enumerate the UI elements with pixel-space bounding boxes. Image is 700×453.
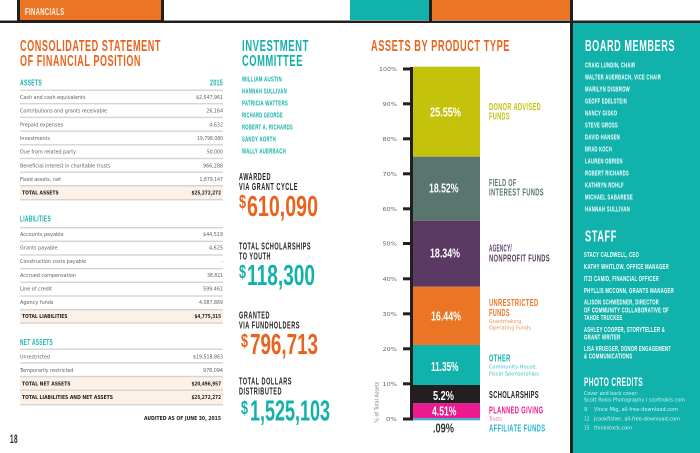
table: liabilities: - [222,259,223,265]
stat: awarded via grant cycle: VIA GRANT CYCLE [239,182,298,193]
bar segment: scholarships: 5.2% [433,388,454,403]
chart: y axis: 50% [382,242,397,248]
board member names: NANCY GISKO [585,111,617,118]
table: assets: $25,272,272 [192,191,221,197]
stat: granted via fundholders [239,311,318,361]
table: liabilities: Line of credit [20,286,52,292]
heading: investment committee: INVESTMENT [242,38,309,55]
table: liabilities: 4,087,889 [199,300,223,306]
stat: awarded via grant cycle: AWARDED [239,172,271,183]
table: net assets: TOTAL LIABILITIES AND NET ASSETS [22,395,113,401]
panel: assets by product type [371,38,550,436]
bar segment: agency nonprofit funds: NONPROFIT FUNDS [489,253,550,264]
committee names: SANDY KORTH [242,137,276,144]
panel: board members, staff and photo credits [570,20,700,453]
stat: granted via fundholders: VIA FUNDHOLDERS [239,320,300,331]
table: liabilities: LIABILITIES [20,214,51,224]
bar segment: field of interest funds: 18.52% [429,180,459,195]
bar segment: unrestricted funds: Grantmaking, [489,319,523,325]
table: assets [20,77,223,200]
committee names: WALLY AUERBACH [242,149,286,156]
stat: total dollars distributed: TOTAL DOLLARS [239,376,292,387]
top header bar [0,0,700,23]
board member names: ROBERT RICHARDS [585,171,629,178]
staff names: STACY CALDWELL, CEO [584,252,639,259]
bar segment: field of interest funds: INTEREST FUNDS [489,188,544,199]
table: assets: Cash and cash equivalents [20,95,86,101]
bar segment: unrestricted funds: 16.44% [431,309,461,324]
chart: y axis: 80% [382,137,397,143]
table: liabilities [20,214,223,324]
stat: total scholarships to youth: 118,300 [247,260,315,292]
board member names: KATHRYN ROHLF [585,183,624,190]
bar segment: scholarships [413,385,539,403]
page number: 18 [10,434,18,446]
note: audited date: AUDITED AS OF JUNE 30, 2015 [144,416,221,422]
staff names: & COMMUNICATIONS [584,354,632,361]
bar segment: unrestricted funds: FUNDS [489,308,510,319]
bar segment: other: OTHER [489,353,511,364]
heading: consolidated statement: CONSOLIDATED STATEMENT [20,38,161,55]
board member names: BRAD KOCH [585,147,612,154]
chart: y axis: 90% [382,102,397,108]
committee names [242,77,293,156]
chart: y axis [374,67,413,423]
bar segment: affiliate funds: AFFILIATE FUNDS [489,423,546,434]
table: liabilities: 38,821 [207,273,223,279]
committee names: RICHARD GEORGE [242,113,283,120]
bar segment: planned giving: 4.51% [432,404,457,419]
board member names: DAVID HANSEN [585,135,620,142]
chart: y axis: % of Total Assets [374,381,380,423]
stat: total dollars distributed [239,376,330,428]
stat: granted via fundholders: $ [241,331,248,351]
bar segment: affiliate funds [413,418,546,436]
table: assets: 4,632 [209,122,223,128]
bar segment: other: 11.35% [431,359,459,374]
chart: y axis: 60% [382,207,397,213]
bar segment: donor advised funds: FUNDS [489,111,510,122]
table: assets: TOTAL ASSETS [22,191,59,197]
photo credits list: 9 [584,407,587,413]
bar segment: planned giving [413,403,544,422]
stat: total scholarships to youth [239,241,315,292]
table: net assets: 978,094 [203,368,223,374]
chart: y axis: 20% [382,347,397,353]
bar segment: donor advised funds [413,67,541,157]
table: net assets: TOTAL NET ASSETS [22,382,71,388]
table: liabilities: $44,519 [203,232,223,238]
bar segment: other: Fiscal Sponsorships [489,371,539,377]
table: assets: Contributions and grants receivable [20,109,107,115]
chart: y axis: 30% [382,312,397,318]
bar segment: affiliate funds: .09% [433,421,454,436]
table: assets: Prepaid expenses [20,122,63,128]
bar segment: scholarships: SCHOLARSHIPS [489,390,539,401]
table: assets: Fixed assets, net [20,177,61,183]
table: net assets: Unrestricted [20,354,50,360]
staff names [584,252,674,361]
photo credits list [584,391,685,432]
heading: assets by product type: ASSETS BY PRODUCT TYPE [371,38,510,55]
bar segment: agency nonprofit funds: AGENCY/ [489,243,512,254]
bar segment: planned giving: Trusts [488,416,502,422]
board member names: GEOFF EDELSTEIN [585,99,627,106]
table: liabilities: Agency funds [20,300,54,306]
table: assets: ASSETS [20,77,42,87]
bar segment: other: Community House, [489,365,537,371]
stat: granted via fundholders: GRANTED [239,311,270,322]
table: assets: 966,288 [203,163,223,169]
photo credits list: Cover and back cover: [584,391,638,397]
stat: total dollars distributed: 1,525,103 [250,396,330,428]
panel: investment committee [242,38,309,156]
board member names: STEVE GROSS [585,123,618,130]
table: net assets: NET ASSETS [20,337,53,347]
bar segment: donor advised funds: DONOR ADVISED [489,102,541,113]
table: liabilities: Grants payable [20,246,58,252]
table: liabilities: Accrued compensation [20,273,76,279]
stat: granted via fundholders: 796,713 [250,329,318,361]
heading: investment committee: COMMITTEE [242,53,303,70]
board member names: CRAIG LUNDIN, CHAIR [585,63,635,70]
panel: consolidated statement of financial position [19,38,223,422]
bar segment: unrestricted funds [413,287,538,345]
staff names: GRANT WRITER [584,335,620,342]
bar segment: unrestricted funds: Operating Funds [489,326,531,332]
chart: y axis: 70% [382,172,397,178]
photo credits list: Scott Rokis Photography / scottrokis.com [584,398,685,404]
bar segment: other [413,345,539,385]
board member names: LAUREN OBRIEN [585,159,623,166]
board member names [585,63,661,214]
chart: y axis: 40% [382,277,397,283]
board member names: HANNAH SULLIVAN [585,207,630,214]
table: liabilities: TOTAL LIABILITIES [22,314,68,320]
bar segment: unrestricted funds: UNRESTRICTED [489,298,538,309]
stat: total scholarships to youth: TO YOUTH [239,251,271,262]
photo credits list: jcookfisher, all-free-download.com [593,416,680,422]
table: net assets: Temporarily restricted [19,368,73,374]
photo credits list: thinkstock.com [594,426,632,432]
stat: total dollars distributed: DISTRIBUTED [239,386,282,397]
staff names: TAHOE TRUCKEE [584,315,622,322]
stat: total dollars distributed: $ [241,398,248,418]
table: net assets: $19,518,863 [193,354,223,360]
bar segment: field of interest funds: FIELD OF [489,178,516,189]
heading: consolidated statement: OF FINANCIAL POSITION [20,53,141,70]
top header bar: FINANCIALS [25,7,64,18]
chart: y axis: 100% [379,67,397,73]
table: liabilities: Construction costs payable [20,259,86,265]
table: liabilities: 599,461 [203,286,223,292]
table: net assets: $20,496,957 [192,382,221,388]
bar segment: field of interest funds [413,157,544,221]
stat: awarded via grant cycle: 610,090 [247,191,318,223]
table: liabilities: Accounts payable [20,232,64,238]
table: net assets [19,337,223,405]
table: liabilities: 4,625 [209,246,223,252]
committee names: WILLIAM AUSTIN [242,77,282,84]
bar segment: agency nonprofit funds: 18.34% [430,246,460,261]
stat: total scholarships to youth: $ [239,262,246,282]
stat: total scholarships to youth: TOTAL SCHOLARSHIPS [239,241,311,252]
photo credits list: 15 [584,426,590,432]
chart: y axis: 0% [386,417,397,423]
stat: awarded via grant cycle: $ [239,192,246,212]
committee names: ROBERT A. RICHARDS [242,125,293,132]
photo credits list: Vince Mig, all-free-download.com [594,407,678,413]
stat: awarded via grant cycle [239,172,318,223]
heading: photo credits: PHOTO CREDITS [584,375,643,389]
committee names: HANNAH SULLIVAN [242,89,287,96]
table: net assets: $25,272,272 [192,395,221,401]
photo credits list: 12 [584,416,590,422]
table: assets: 50,000 [207,150,223,156]
heading: staff: STAFF [585,228,617,245]
table: assets: 1,879,147 [200,177,223,183]
table: assets: Investments [20,136,50,142]
table: assets: 26,164 [206,109,223,115]
table: assets: $2,547,961 [196,95,223,101]
bar segment: agency nonprofit funds [413,221,550,287]
board member names: MARILYN DISBROW [585,87,630,94]
committee names: PATRICIA WATTERS [242,101,288,108]
chart: y axis: 10% [382,382,397,388]
table: assets: 2015 [210,77,223,87]
table: assets: Beneficial interest in charitable trusts [20,163,111,169]
bar segment: donor advised funds: 25.55% [430,105,461,120]
table: assets: Due from related party [20,150,76,156]
bar segment: planned giving: PLANNED GIVING [489,406,544,417]
table: liabilities: $4,775,315 [194,314,221,320]
table: assets: 19,798,080 [197,136,223,142]
board member names: MICHAEL SABARESE [585,195,633,202]
